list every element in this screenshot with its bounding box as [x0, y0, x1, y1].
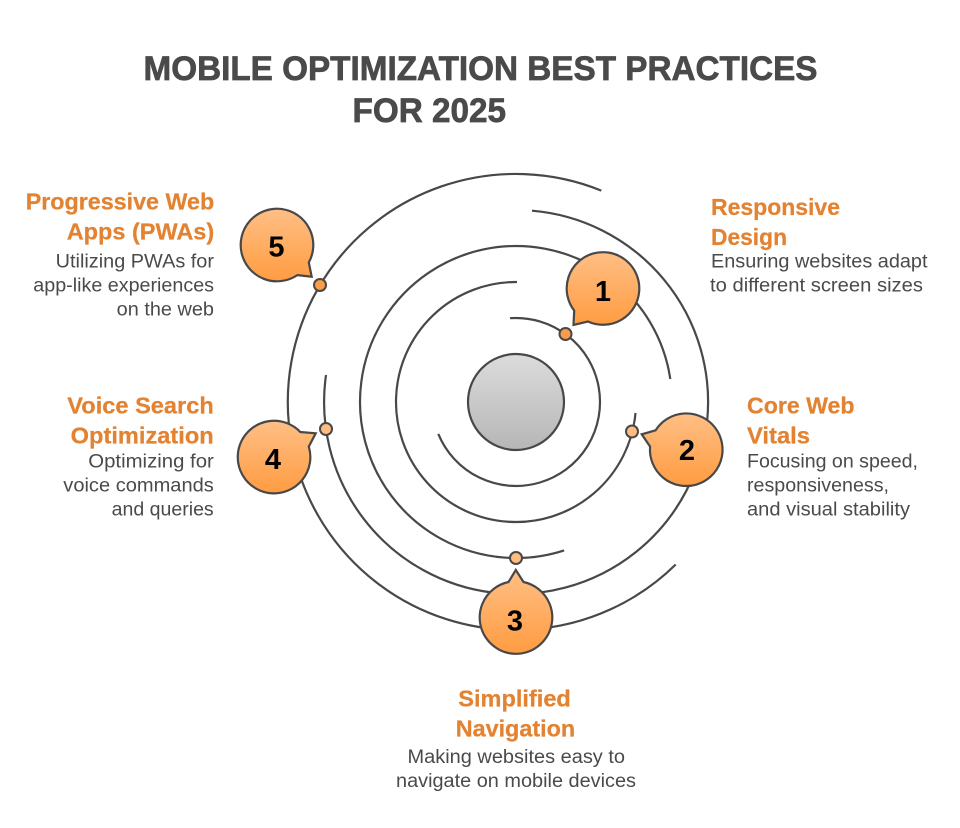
- title: MOBILE OPTIMIZATION BEST PRACTICES: [144, 50, 818, 88]
- text block: Core Web Vitals: and visual stability: [747, 500, 911, 520]
- text block: Responsive Design: [710, 194, 928, 296]
- title: [144, 50, 818, 130]
- badge 5: [241, 209, 313, 281]
- text block: Responsive Design: Design: [711, 224, 787, 250]
- text block: Simplified Navigation: Navigation: [456, 716, 575, 742]
- badge 1: [567, 252, 639, 325]
- text block: Voice Search Optimization: Optimizing for: [88, 452, 215, 472]
- text block: Responsive Design: to different screen sizes: [710, 276, 923, 296]
- badge 1: 1: [595, 276, 611, 308]
- marker dot 1: [560, 328, 572, 340]
- text block: Progressive Web Apps: app-like experiences: [33, 276, 214, 296]
- text block: Responsive Design: Ensuring websites adapt: [711, 252, 928, 272]
- text block: Progressive Web Apps: Utilizing PWAs for: [56, 252, 215, 272]
- badge 5: 5: [268, 232, 285, 264]
- badge 2: 2: [679, 435, 695, 467]
- text block: Progressive Web Apps: on the web: [117, 300, 214, 320]
- text block: Responsive Design: Responsive: [711, 194, 840, 220]
- text block: Core Web Vitals: [747, 392, 918, 520]
- center circle: [468, 354, 564, 450]
- text block: Progressive Web Apps: Progressive Web: [26, 188, 214, 214]
- text block: Voice Search Optimization: and queries: [112, 500, 214, 520]
- text block: Core Web Vitals: Vitals: [747, 422, 810, 448]
- title: FOR 2025: [352, 92, 506, 130]
- text block: Voice Search Optimization: Voice Search: [67, 392, 214, 418]
- text block: Progressive Web Apps: Apps (PWAs): [67, 218, 214, 244]
- text block: Progressive Web Apps: [26, 188, 215, 320]
- text block: Core Web Vitals: Core Web: [747, 392, 854, 418]
- text block: Voice Search Optimization: [63, 392, 215, 520]
- badge 3: [480, 570, 552, 654]
- text block: Simplified Navigation: Simplified: [458, 686, 571, 712]
- text block: Core Web Vitals: responsiveness,: [747, 476, 889, 496]
- text block: Simplified Navigation: Making websites easy to: [408, 747, 625, 768]
- badge 2: [642, 413, 723, 486]
- badge 4: 4: [265, 444, 281, 476]
- text block: Voice Search Optimization: voice commands: [63, 476, 214, 496]
- marker dot 3: [510, 552, 522, 564]
- badge 4: [238, 421, 316, 493]
- marker dot 2: [626, 426, 638, 438]
- concentric ring diagram: [288, 174, 708, 630]
- text block: Simplified Navigation: [396, 686, 636, 792]
- text block: Simplified Navigation: navigate on mobile devices: [396, 771, 636, 792]
- marker dot 5: [314, 279, 326, 291]
- badge 3: 3: [507, 606, 523, 638]
- marker dot 4: [320, 423, 332, 435]
- text block: Voice Search Optimization: Optimization: [71, 422, 214, 448]
- text block: Core Web Vitals: Focusing on speed,: [747, 452, 918, 472]
